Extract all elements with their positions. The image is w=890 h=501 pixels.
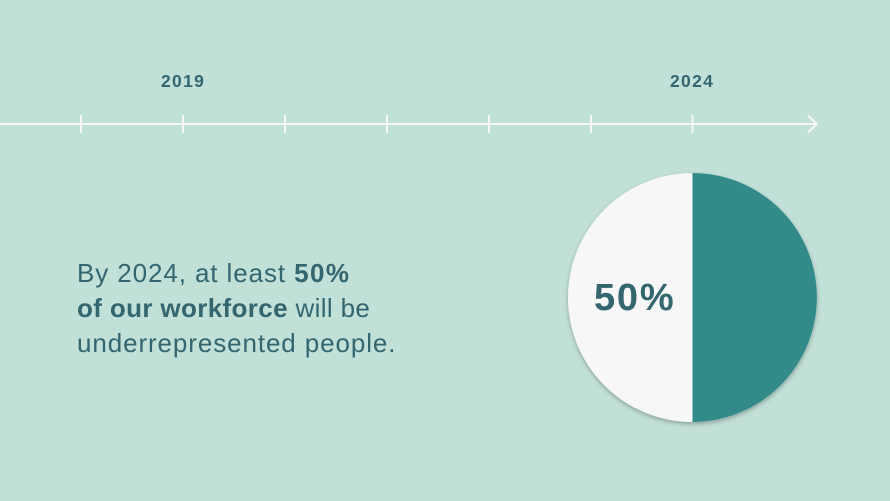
year label: 2024: 2024 — [670, 71, 714, 91]
body text: underrepresented people. — [77, 328, 396, 358]
pie chart: 50%: 50% — [594, 277, 675, 319]
body text: of our workforce will be — [77, 293, 370, 323]
year label: 2019: 2019 — [161, 71, 205, 91]
pie chart: 50% — [566, 172, 820, 426]
body text — [77, 258, 396, 358]
body text: By 2024, at least 50% — [77, 258, 350, 288]
